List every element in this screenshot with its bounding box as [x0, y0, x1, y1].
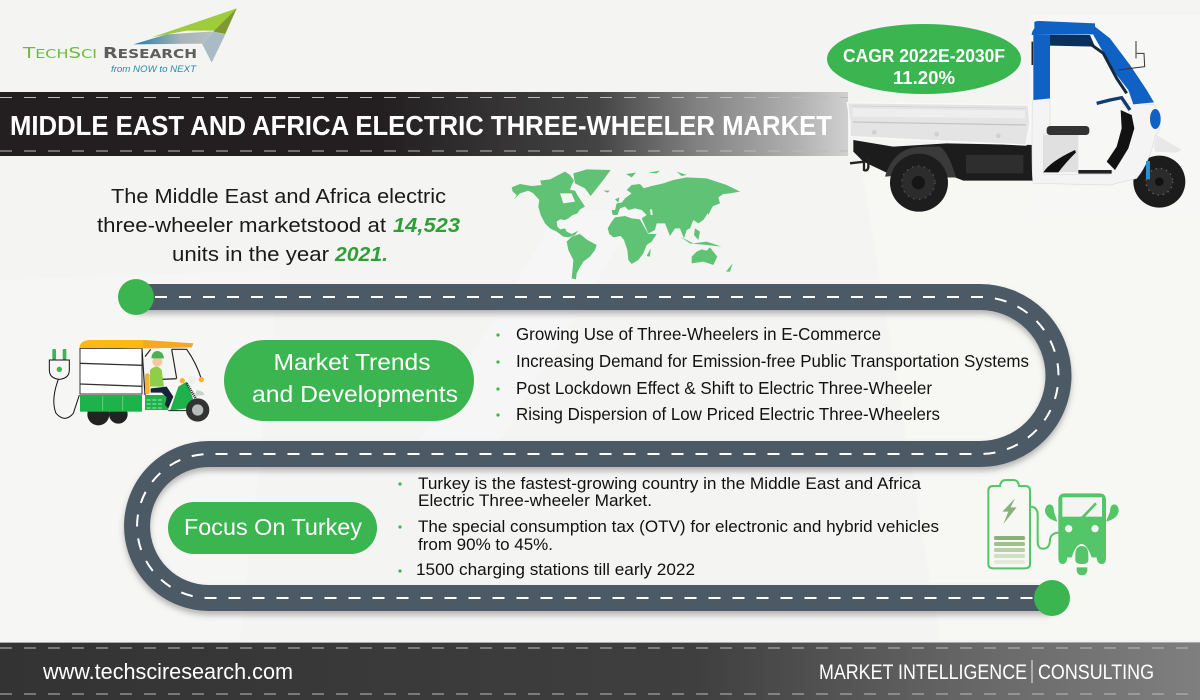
list: market trends — [496, 324, 1029, 424]
pill: market trends: and Developments — [252, 381, 458, 407]
list: focus on Turkey: Turkey is the fastest-growing country in the Middle East and Africa — [418, 474, 922, 493]
title banner — [0, 92, 848, 156]
footer — [0, 642, 1200, 700]
icon: electric auto rickshaw — [49, 340, 209, 425]
intro text: 2021. — [334, 243, 388, 266]
CAGR badge — [827, 24, 1021, 94]
intro text: units in the year — [172, 243, 329, 266]
intro text: The Middle East and Africa electric — [111, 185, 446, 208]
title banner: MIDDLE EAST AND AFRICA ELECTRIC THREE-WHEELER MARKET — [10, 110, 832, 141]
intro text — [97, 185, 461, 266]
pill: market trends — [224, 340, 474, 421]
logo: R ESEARCH — [103, 44, 197, 62]
list: market trends: Growing Use of Three-Wheelers in E-Commerce — [516, 324, 881, 344]
world map — [512, 169, 740, 279]
route end marker — [1034, 580, 1070, 616]
road — [136, 297, 1058, 602]
footer: www.techsciresearch.com — [42, 659, 293, 684]
list: focus on Turkey: 1500 charging stations till early 2022 — [416, 560, 695, 579]
pill: market trends: Market Trends — [274, 349, 430, 375]
truck front: cab — [1032, 21, 1185, 208]
logo — [22, 8, 237, 75]
icon: battery charging vehicle — [988, 480, 1119, 575]
footer: MARKET INTELLIGENCE — [819, 661, 1027, 684]
list: focus on Turkey: from 90% to 45%. — [418, 535, 553, 554]
list: focus on Turkey: Electric Three-wheeler Market. — [418, 491, 652, 510]
CAGR badge: CAGR 2022E-2030F — [843, 45, 1005, 66]
truck rear: cargo bed and chassis — [847, 103, 1033, 212]
list: focus on Turkey: The special consumption tax (OTV) for electronic and hybrid vehicles — [418, 517, 939, 536]
intro text: 14,523 — [393, 214, 461, 237]
logo: T ECH S CI — [22, 44, 97, 62]
footer: CONSULTING — [1038, 661, 1154, 684]
list: market trends: Post Lockdown Effect & Shift to Electric Three-Wheeler — [516, 378, 932, 398]
CAGR badge: 11.20% — [893, 67, 955, 88]
pill: focus on Turkey: Focus On Turkey — [184, 514, 362, 540]
list: market trends: Rising Dispersion of Low Priced Electric Three-Wheelers — [516, 404, 940, 424]
list: market trends: Increasing Demand for Emission-free Public Transportation Systems — [516, 351, 1029, 371]
logo: from NOW to NEXT — [111, 64, 197, 75]
pill: focus on Turkey — [168, 502, 377, 554]
list: focus on Turkey — [398, 474, 939, 579]
image: electric cargo three-wheeler — [847, 21, 1185, 212]
route start marker — [118, 279, 154, 315]
intro text: three-wheeler marketstood at — [97, 214, 386, 237]
